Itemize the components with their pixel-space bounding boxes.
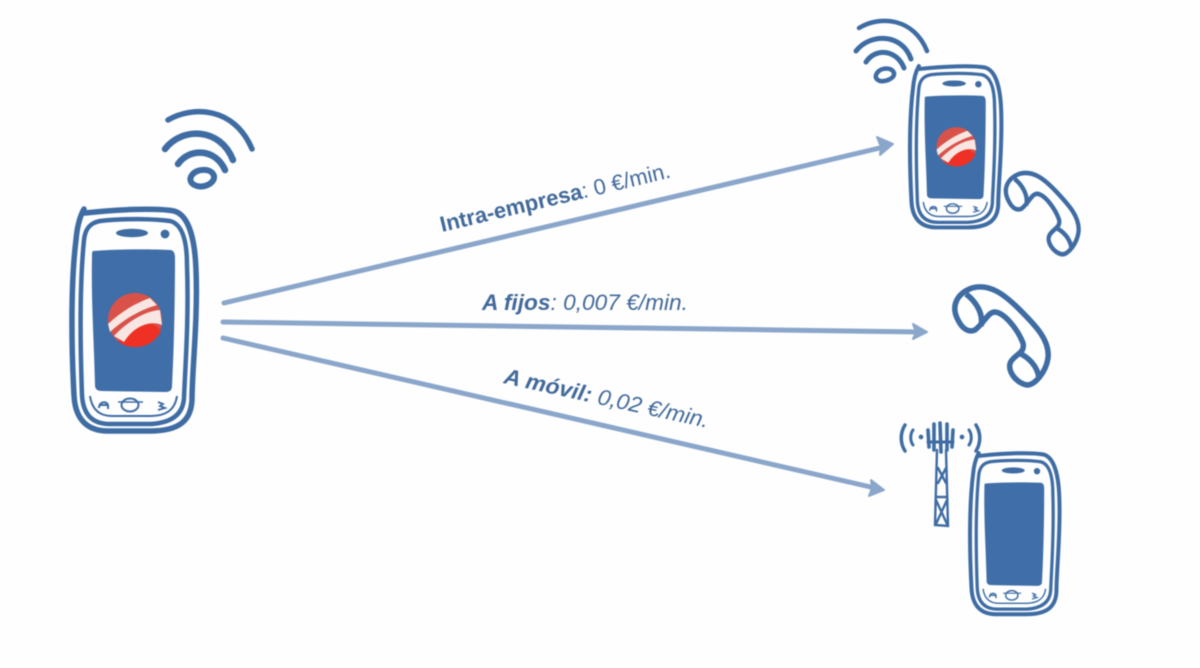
icon: company logo — [108, 293, 162, 347]
icon: recipient wifi signal — [856, 21, 927, 81]
arrow: landline — [223, 322, 927, 339]
arrow: mobile — [223, 338, 884, 496]
icon: recipient company phone with logo — [910, 66, 1001, 227]
label: intra-company rate: Intra-empresa: 0 €/min. — [437, 158, 673, 237]
icon: handset next to company phone — [1006, 173, 1079, 254]
arrow: intra-company — [224, 137, 893, 303]
icon: mobile recipient phone — [970, 453, 1060, 614]
icon: antenna tower with radio waves — [901, 423, 980, 526]
icon: landline handset — [955, 287, 1048, 385]
icon: caller wifi signal — [165, 112, 252, 186]
label: landline rate: A fijos: 0,007 €/min. — [481, 290, 688, 315]
icon: caller phone with logo — [72, 209, 196, 431]
label: mobile rate: A móvil: 0,02 €/min. — [501, 363, 711, 433]
